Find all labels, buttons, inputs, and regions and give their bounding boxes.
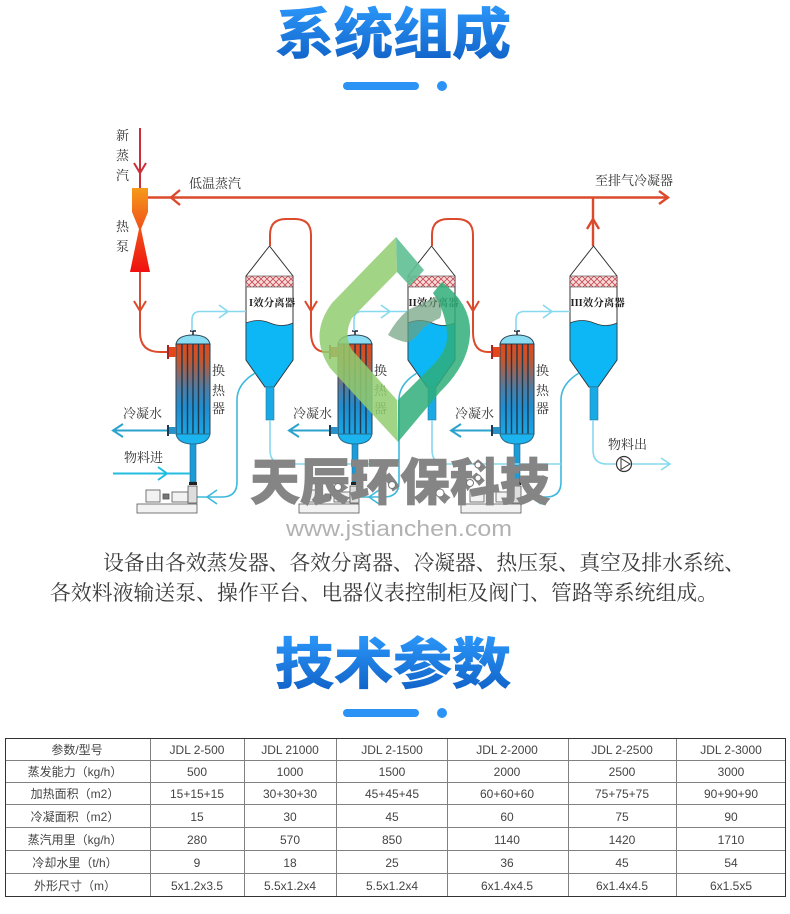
title divider: bar and dot	[343, 708, 447, 718]
watermark: website: www.jstianchen.com	[285, 516, 512, 541]
table row: cooling water: 54	[724, 856, 738, 870]
table row: header: JDL 21000	[261, 743, 319, 757]
table row: cooling water	[32, 856, 738, 870]
table row: cooling water: 45	[615, 856, 629, 870]
table row: heating area: 75+75+75	[595, 787, 649, 801]
table row: condensing area: 冷凝面积（m2）	[31, 809, 119, 824]
table row: overall dimensions: 6x1.4x4.5	[481, 879, 533, 893]
separator I	[246, 246, 296, 420]
label: new steam: 蒸	[116, 148, 129, 163]
separator II	[408, 246, 459, 420]
table row: evaporation capacity: 1000	[277, 765, 304, 779]
table row: header: JDL 2-2500	[591, 743, 653, 757]
watermark bubbles	[334, 462, 481, 497]
table row: steam consumption: 蒸汽用里（kg/h）	[28, 832, 122, 847]
table row: evaporation capacity: 1500	[379, 765, 406, 779]
table row: cooling water: 18	[283, 856, 297, 870]
heat exchanger II: 换	[374, 363, 387, 378]
table row: heating area: 30+30+30	[263, 787, 317, 801]
table row: condensing area: 60	[500, 810, 514, 824]
table row: evaporation capacity: 2000	[494, 765, 521, 779]
vapour pipe: separator II to exchanger III	[432, 219, 492, 352]
process flow diagram	[113, 128, 673, 513]
separator I: I效分离器	[249, 296, 296, 309]
table row: heating area	[31, 787, 758, 801]
heat pump ejector	[130, 188, 150, 272]
table row: header: JDL 2-3000	[700, 743, 762, 757]
low temperature steam main line	[148, 190, 668, 246]
label: new steam: 新	[116, 128, 129, 143]
table row: heating area: 加热面积（m2）	[31, 787, 119, 801]
separator II: II效分离器	[408, 296, 459, 309]
title: 技术参数: 技术参数	[275, 634, 511, 696]
table row: cooling water: 36	[500, 856, 514, 870]
heat exchanger I: 器	[212, 401, 225, 416]
table row: header: 参数/型号	[51, 742, 103, 757]
label: condensate	[123, 406, 494, 421]
table row: evaporation capacity: 500	[187, 765, 207, 779]
label: condensate: 冷凝水	[123, 406, 162, 421]
description paragraph: 设备由各效蒸发器、各效分离器、冷凝器、热压泵、真空及排水系统、	[103, 552, 745, 575]
technical parameters table	[6, 738, 786, 896]
table row: condensing area: 15	[190, 810, 204, 824]
table row: heating area: 45+45+45	[365, 787, 419, 801]
liquid recirculation pipes	[197, 373, 579, 504]
label: feed in: 物料进	[124, 450, 163, 465]
table row: cooling water: 25	[385, 856, 399, 870]
table row: steam consumption: 1710	[718, 833, 745, 847]
table row: steam consumption: 280	[187, 833, 207, 847]
table row: overall dimensions: 外形尺寸（m）	[34, 879, 116, 893]
label: new steam	[116, 128, 129, 183]
watermark logo: green emblem	[319, 237, 470, 442]
table row: header: JDL 2-2000	[476, 743, 538, 757]
table row: cooling water: 冷却水里（t/h）	[32, 856, 118, 870]
watermark: company name: 天辰环保科技	[250, 455, 550, 511]
feed inlet line	[113, 467, 190, 480]
table row: condensing area	[31, 809, 738, 824]
table row: steam consumption: 1420	[609, 833, 636, 847]
table row: heating area: 60+60+60	[480, 787, 534, 801]
table row: evaporation capacity	[28, 764, 745, 779]
heat exchanger II	[329, 331, 388, 485]
heat exchanger III: 热	[536, 383, 550, 398]
label: product out: 物料出	[608, 437, 647, 452]
liquid transfer lines between effects	[270, 420, 561, 464]
table grid	[6, 738, 786, 896]
label: heat pump: 泵	[116, 239, 129, 254]
heat exchanger III	[491, 331, 550, 485]
description paragraph	[50, 552, 745, 605]
label: condensate: 冷凝水	[293, 406, 332, 421]
table row: header: JDL 2-500	[170, 743, 225, 757]
separator III: III效分离器	[570, 296, 625, 309]
table row: header: JDL 2-1500	[361, 743, 423, 757]
table row: overall dimensions	[34, 879, 752, 893]
feed pump III	[461, 486, 521, 513]
table row: overall dimensions: 5.5x1.2x4	[264, 879, 316, 893]
table row: heating area: 15+15+15	[170, 787, 224, 801]
table row: heating area: 90+90+90	[704, 787, 758, 801]
label: heat pump	[116, 219, 130, 254]
separator III	[570, 246, 625, 420]
table row: evaporation capacity: 蒸发能力（kg/h）	[28, 764, 122, 779]
table row: evaporation capacity: 2500	[609, 765, 636, 779]
heat exchanger I	[167, 331, 226, 485]
new steam inlet pipe with arrow	[134, 128, 146, 188]
heat exchanger III: 器	[536, 401, 549, 416]
secondary vapour lines	[192, 305, 570, 331]
heat exchanger II: 热	[374, 383, 388, 398]
condensate outlets with arrows	[113, 424, 491, 437]
title divider: bar and dot	[343, 81, 447, 91]
table row: evaporation capacity: 3000	[718, 765, 745, 779]
label: new steam: 汽	[116, 168, 129, 183]
table row: condensing area: 75	[615, 810, 629, 824]
table row: overall dimensions: 6x1.5x5	[710, 879, 752, 893]
description paragraph: 各效料液输送泵、操作平台、电器仪表控制柜及阀门、管路等系统组成。	[50, 581, 718, 605]
table row: condensing area: 30	[283, 810, 297, 824]
pipe: heat pump to exchanger I	[134, 272, 168, 352]
label: low temperature steam: 低温蒸汽	[189, 176, 241, 191]
pump on product outlet	[616, 456, 632, 472]
table row: condensing area: 45	[385, 810, 399, 824]
label: to exhaust condenser: 至排气冷凝器	[595, 173, 673, 188]
heat exchanger II: 器	[374, 401, 387, 416]
vapour pipe: separator I to exchanger II	[270, 219, 330, 352]
feed pump I	[137, 486, 197, 513]
label: heat pump: 热	[116, 219, 130, 234]
table row: steam consumption: 1140	[494, 833, 520, 847]
table row: steam consumption: 570	[280, 833, 300, 847]
table row: header	[51, 742, 762, 757]
table row: condensing area: 90	[724, 810, 738, 824]
table row: steam consumption	[28, 832, 745, 847]
table row: overall dimensions: 5x1.2x3.5	[171, 879, 223, 893]
title: 系统组成: 系统组成	[275, 4, 511, 66]
heat exchanger III: 换	[536, 363, 549, 378]
label: condensate: 冷凝水	[455, 406, 494, 421]
table row: cooling water: 9	[194, 856, 201, 870]
table row: steam consumption: 850	[382, 833, 402, 847]
table row: overall dimensions: 5.5x1.2x4	[366, 879, 418, 893]
heat exchanger I: 热	[212, 383, 226, 398]
product outlet line with arrow	[593, 420, 670, 470]
feed pump II	[299, 486, 359, 513]
heat exchanger I: 换	[212, 363, 225, 378]
table row: overall dimensions: 6x1.4x4.5	[596, 879, 648, 893]
